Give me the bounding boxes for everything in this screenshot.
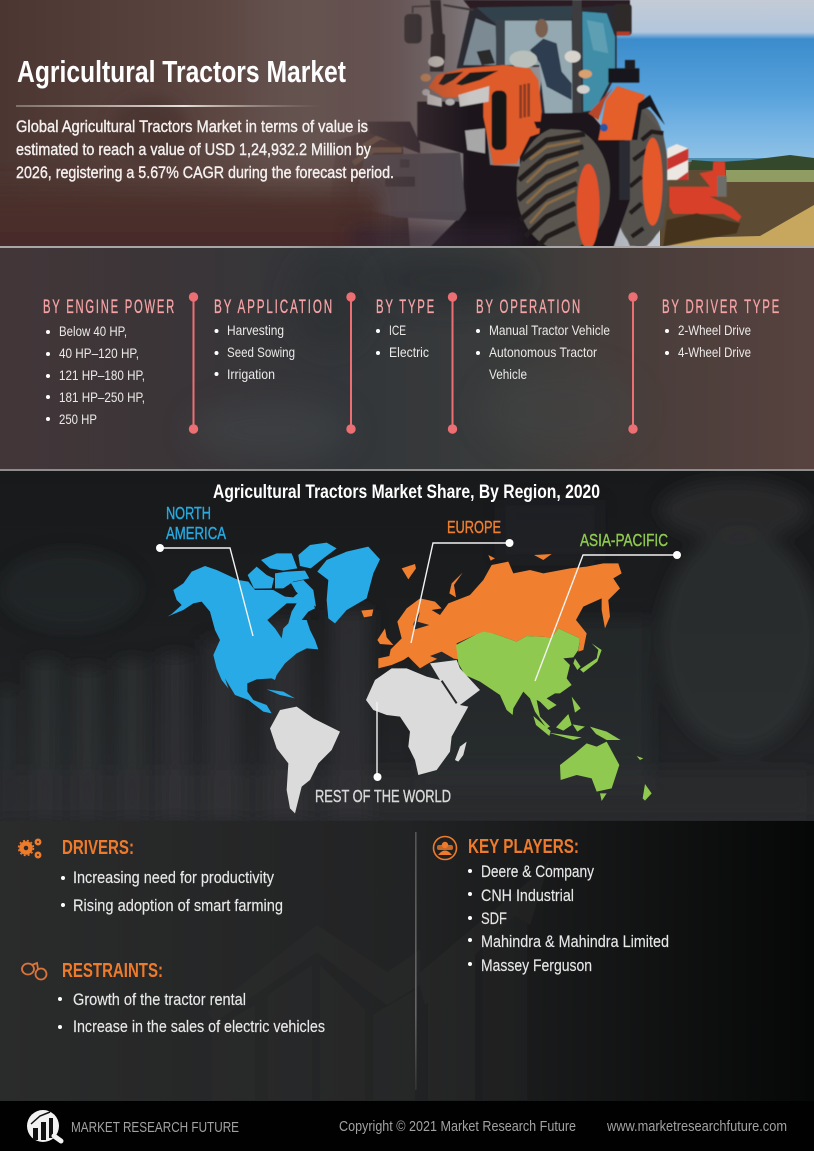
segment: by application: Seed Sowing [227,344,295,360]
panel: header with tractor photo [0,0,814,272]
segment: by application: Irrigation [227,366,275,382]
region: iceland [361,609,373,617]
icon: people in target [434,836,456,860]
far rear wheel [612,106,668,247]
drivers: DRIVERS: [62,837,134,859]
website: www.marketresearchfuture.com [606,1118,787,1135]
segment: by type: ICE [389,322,406,338]
label: europe: EUROPE [447,517,501,537]
intro paragraph [16,117,394,182]
key players: Deere & Company [481,862,594,881]
drivers: Rising adoption of smart farming [73,896,283,915]
divider 1 [189,292,198,434]
bottom shadow [352,220,516,246]
key players: Mahindra & Mahindra Limited [481,932,669,951]
segment: by engine power: 250 HP [59,411,97,427]
segment: by engine power: 121 HP–180 HP, [59,367,145,383]
callout lines [160,543,677,777]
label: north america: AMERICA [166,523,226,543]
key players: CNH Industrial [481,886,574,905]
intro paragraph: 2026, registering a 5.67% CAGR during the forecast period. [16,163,394,182]
panel: regional market share map [0,471,814,821]
restraints: RESTRAINTS: [62,960,163,982]
icon: logo magnifier [27,1110,61,1142]
segment: by application: BY APPLICATION [214,297,334,318]
divider 4 [628,292,638,434]
segment: by engine power: 40 HP–120 HP, [59,345,139,361]
title: Agricultural Tractors Market [17,54,346,89]
exhaust and left mirror [430,0,445,72]
segment: by engine power: BY ENGINE POWER [43,297,176,318]
restraints: Growth of the tractor rental [73,990,246,1009]
divider 3 [448,292,457,434]
segment: by driver type [662,297,781,360]
intro paragraph: Global Agricultural Tractors Market in terms of value is [16,117,368,136]
region: asia-pacific [456,628,580,728]
key players: KEY PLAYERS: [468,836,579,858]
copyright: Copyright © 2021 Market Research Future [339,1118,576,1135]
segment: by engine power [43,297,176,427]
region: north america [167,543,380,713]
baltic and black seas [413,612,453,661]
region: rest of the world [270,660,480,813]
ground [0,178,386,246]
segment: by engine power: Below 40 HP, [59,323,127,339]
panel: market segments [0,246,814,471]
key players: SDF [481,909,507,928]
segment: by operation [476,297,610,382]
field background [660,155,814,246]
cab frame [457,3,617,115]
chassis strut [619,141,630,200]
weight block [357,153,466,221]
panel: footer [0,1101,814,1151]
callout dots [156,539,681,781]
chassis [417,102,522,247]
hood [428,65,542,165]
company name: MARKET RESEARCH FUTURE [71,1119,239,1136]
segment: by type: BY TYPE [376,297,436,318]
rear fender [598,86,645,140]
tree silhouette [119,99,186,160]
tractor [330,0,742,250]
title rule [16,105,321,107]
segment: by operation: BY OPERATION [476,297,582,318]
front tire behind weight [339,132,410,246]
driver [535,19,548,38]
key players: Massey Ferguson [481,956,592,975]
panel: drivers, restraints and key players [0,821,814,1101]
segment: by type [376,299,434,357]
divider 2 [346,292,356,434]
icon: gears [18,840,40,857]
label: north america: NORTH [166,503,211,523]
segment: by operation: Manual Tractor Vehicle [489,322,610,338]
column divider [415,832,417,1090]
blurred background shapes [0,480,814,820]
key players [434,836,669,975]
segment: by operation: Vehicle [489,366,527,382]
segment: by driver type: 2-Wheel Drive [678,322,751,338]
label: north america [166,503,226,543]
segment: by driver type: 4-Wheel Drive [678,344,751,360]
faint background chart arrow [207,860,550,1100]
chart title: Agricultural Tractors Market Share, By Region, 2020 [213,482,600,503]
world map [156,539,681,813]
segment: by operation: Autonomous Tractor [489,344,597,360]
label: rest of the world: REST OF THE WORLD [315,786,451,806]
left fade over photo [330,0,460,246]
segment: by application: Harvesting [227,322,284,338]
drivers: Increasing need for productivity [73,868,274,887]
segment: by engine power: 181 HP–250 HP, [59,389,145,405]
tire tread [518,134,585,248]
rear wheel [517,127,610,250]
region: europe and russia [377,554,622,668]
drivers [18,837,283,915]
label: asia-pacific: ASIA-PACIFIC [580,530,668,550]
intro paragraph: estimated to reach a value of USD 1,24,932.2 Million by [16,140,371,159]
work lights [428,56,444,67]
icon: handcuffs [22,963,46,980]
implement [667,144,688,180]
segment: by type: Electric [389,344,429,360]
restraints [22,960,325,1036]
restraints: Increase in the sales of electric vehicles [73,1017,325,1036]
segment: by application [214,297,334,382]
